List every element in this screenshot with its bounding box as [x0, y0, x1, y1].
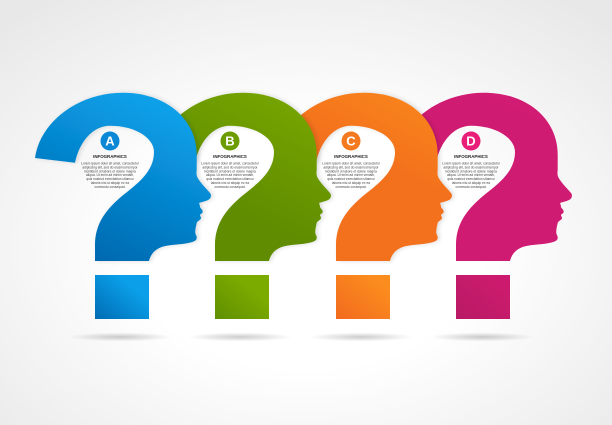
text block C: INFOGRAPHICS	[334, 154, 368, 159]
text block B: Lorem ipsum dolor sit amet, consectetur	[201, 162, 260, 166]
head shape C	[276, 93, 452, 261]
text block B: incididunt ut labore et dolore magna	[204, 169, 256, 173]
text block D: quis nostrud exercitation ullamco	[447, 177, 495, 181]
text block A: commodo consequat.	[94, 185, 126, 189]
text block D: Lorem ipsum dolor sit amet, consectetur	[442, 162, 501, 166]
text block C: quis nostrud exercitation ullamco	[327, 177, 375, 181]
text block C	[322, 154, 381, 189]
text block A	[81, 154, 140, 189]
text block A: quis nostrud exercitation ullamco	[86, 177, 134, 181]
square dot A	[95, 275, 149, 319]
text block B: quis nostrud exercitation ullamco	[206, 177, 254, 181]
text block C: laboris nisi ut aliquip ex ea	[332, 181, 370, 185]
badge B: B	[225, 134, 235, 148]
floor shadows	[68, 332, 534, 342]
text block C: commodo consequat.	[335, 185, 367, 189]
text block C: Lorem ipsum dolor sit amet, consectetur	[322, 162, 381, 166]
text block C: aliqua. Ut enim ad minim veniam,	[327, 173, 375, 177]
text block A: adipiscing elit, sed do eiusmod tempor	[82, 165, 139, 169]
text block B	[201, 154, 260, 189]
badge D	[462, 132, 480, 150]
panel B: green head question mark	[155, 93, 331, 319]
text block D	[442, 154, 501, 189]
text block C: incididunt ut labore et dolore magna	[325, 169, 377, 173]
text block D: aliqua. Ut enim ad minim veniam,	[447, 173, 495, 177]
text block A: incididunt ut labore et dolore magna	[84, 169, 136, 173]
square dot C	[336, 275, 390, 319]
text block D: incididunt ut labore et dolore magna	[445, 169, 497, 173]
badge D: D	[466, 134, 476, 148]
badge A: A	[105, 134, 115, 148]
text block A: laboris nisi ut aliquip ex ea	[91, 181, 129, 185]
text block D: laboris nisi ut aliquip ex ea	[452, 181, 490, 185]
text block B: INFOGRAPHICS	[213, 154, 247, 159]
badge A	[100, 132, 120, 150]
head shape D	[396, 93, 572, 261]
panel D: pink head question mark	[396, 93, 572, 319]
square dot B	[215, 275, 269, 319]
text block D: commodo consequat.	[455, 185, 487, 189]
text block D: adipiscing elit, sed do eiusmod tempor	[443, 165, 500, 169]
text block A: INFOGRAPHICS	[93, 154, 127, 159]
head shape B	[155, 93, 331, 261]
badge B	[220, 132, 240, 150]
text block B: laboris nisi ut aliquip ex ea	[211, 181, 249, 185]
panel C: orange head question mark	[276, 93, 452, 319]
square dot D	[456, 275, 510, 319]
text block A: Lorem ipsum dolor sit amet, consectetur	[81, 162, 140, 166]
text block A: aliqua. Ut enim ad minim veniam,	[86, 173, 134, 177]
head shape A	[35, 93, 211, 261]
badge C: C	[346, 134, 356, 148]
panel A: blue head question mark	[35, 93, 211, 319]
text block B: aliqua. Ut enim ad minim veniam,	[206, 173, 254, 177]
badge C	[342, 132, 360, 150]
text block C: adipiscing elit, sed do eiusmod tempor	[323, 165, 380, 169]
text block D: INFOGRAPHICS	[454, 154, 488, 159]
text block B: commodo consequat.	[214, 185, 246, 189]
text block B: adipiscing elit, sed do eiusmod tempor	[202, 165, 259, 169]
